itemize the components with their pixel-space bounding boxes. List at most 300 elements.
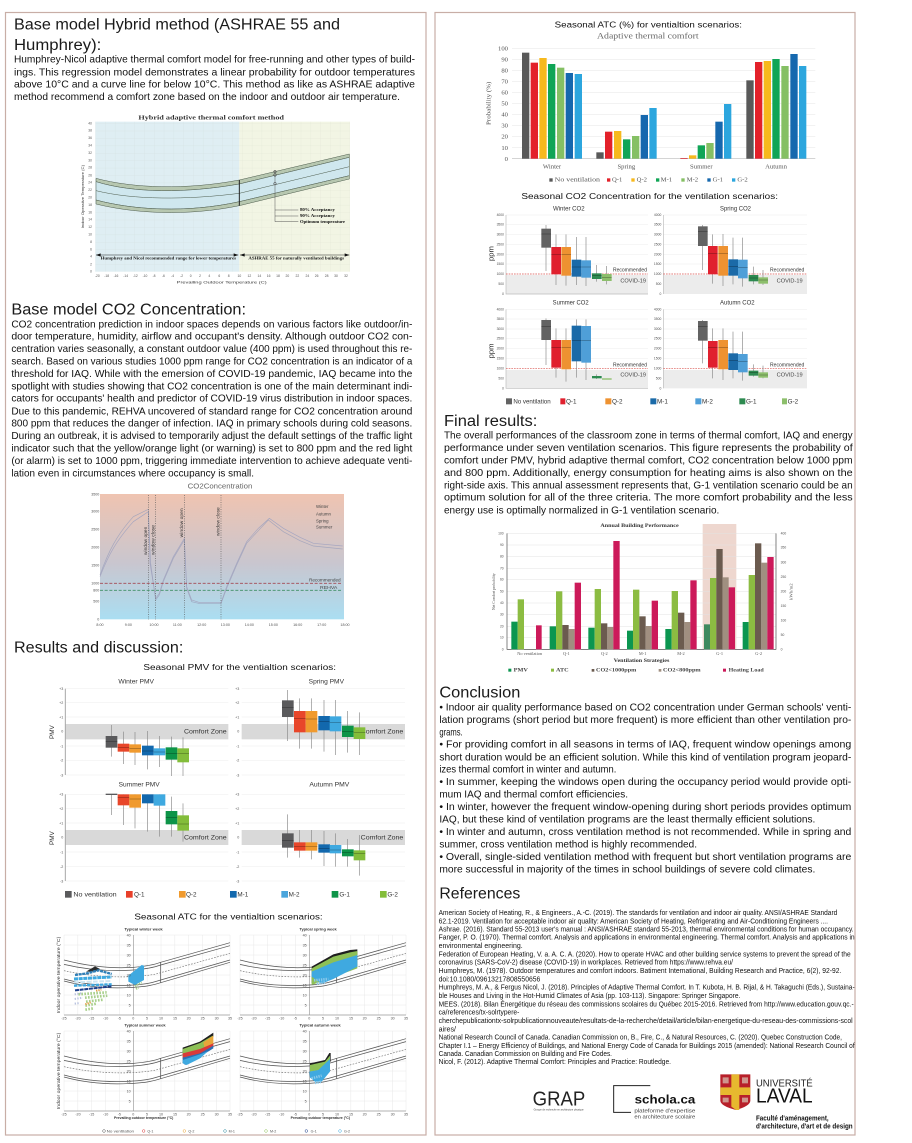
text block: references list: Fanger, P. O. (1970). Thermal comfort. Analysis and applications in environmental engineering. Thermal comfort. Analysis and applications in xyxy=(439,933,855,942)
chart: hybrid adaptive thermal comfort: 32 xyxy=(344,274,348,278)
chart: annual building performance: 250 xyxy=(781,575,786,579)
logo: Université Laval: d'architecture, d'art et de design xyxy=(756,1124,853,1131)
legend: ATC percent scenarios: Q-2 xyxy=(637,177,647,184)
text block: CO2 concentration description: Due to this pandemic, REHVA uncovered of standard range for CO2 concentration around xyxy=(11,406,412,417)
legend: PMV scenarios xyxy=(65,891,398,899)
chart: summer PMV box plot: +2 xyxy=(59,807,63,811)
chart: hybrid adaptive thermal comfort: 16 xyxy=(88,210,92,214)
text block: references list: Canada. Canadian Commission on Building and Fire Codes. xyxy=(439,1049,612,1058)
chart: autumn PMV box plot: Comfort Zone xyxy=(361,834,404,841)
chart: annual building performance: Annual Building Performance xyxy=(600,523,679,529)
chart: summer PMV box plot: PMV xyxy=(49,831,56,845)
legend: ATC percent scenarios: M-1 xyxy=(661,177,672,184)
chart: annual building performance: 100 xyxy=(498,531,504,535)
legend: ATC scenarios: G-2 xyxy=(344,1129,350,1133)
text block: references list: Chapter I.1 – Energy Efficiency of Buildings, and National Energy Code of Canada for Buildings 2015 (amended): National Research Council of xyxy=(439,1041,856,1050)
chart: CO2 concentration curve: Autumn xyxy=(316,512,332,517)
text block: references list: American Society of Heating, R., & Engineers., A.-C. (2019). The standards for ventilation and indoor air quality. ANSI/ASHRAE Standard xyxy=(439,908,837,917)
chart: CO2 concentration curve: Spring xyxy=(316,518,329,523)
heading: conclusion: Conclusion xyxy=(439,685,520,702)
text block: references list: National Research Council of Canada. Canadian Commission on, B., Fire, C., & Natural Resources, C. (2020). Quebec Construction Code, xyxy=(439,1033,842,1042)
chart: summer CO2 box plot: 4000 xyxy=(497,307,504,311)
legend: ATC percent scenarios: M-2 xyxy=(687,177,698,184)
chart: hybrid adaptive thermal comfort: 30 xyxy=(88,158,92,162)
legend: ATC percent scenarios: G-1 xyxy=(713,177,723,184)
chart: seasonal ATC percent bars: 0 xyxy=(505,156,509,163)
text block: conclusion bullets: • In summer, keeping the windows open during the occupancy period would provide opti- xyxy=(439,777,851,788)
text block: references list: Nicol, F. (2012). Adaptive Thermal Comfort: Principles and Practice: Routledge. xyxy=(439,1057,671,1066)
chart: hybrid adaptive thermal comfort: -10 xyxy=(143,274,148,278)
chart: spring CO2 box plot: 2000 xyxy=(654,252,661,256)
chart: hybrid adaptive thermal comfort: 20 xyxy=(88,195,92,199)
text block: CO2 concentration description: lation even in circumstances where occupancy is small. xyxy=(11,469,254,480)
chart: hybrid adaptive thermal comfort: 4 xyxy=(208,274,210,278)
chart: autumn CO2 box plot: Recommended xyxy=(770,362,804,368)
chart: spring CO2 box plot: 1000 xyxy=(654,272,661,276)
chart: spring CO2 box plot: 0 xyxy=(659,292,661,296)
chart: CO2 concentration curve: 500 xyxy=(93,599,99,603)
text block: final results description: energy use is optimally normalized in G-1 ventilation scenario. xyxy=(444,505,719,516)
chart: autumn PMV box plot: 0 xyxy=(237,836,239,840)
chart: hybrid adaptive thermal comfort: 36 xyxy=(88,136,92,140)
chart: hybrid adaptive thermal comfort: 2 xyxy=(90,262,92,266)
chart: summer CO2 box plot: 2000 xyxy=(497,347,504,351)
chart: typical autumn week: 5 xyxy=(305,1099,307,1103)
chart: hybrid adaptive thermal comfort: 24 xyxy=(88,181,92,185)
chart: typical winter week: 15 xyxy=(173,1017,177,1021)
chart: typical spring week: 35 xyxy=(303,943,307,947)
text block: hybrid method description: Humphrey-Nicol adaptive thermal comfort model for free-running and other types of build- xyxy=(14,55,415,66)
chart: autumn CO2 box plot: 1000 xyxy=(654,366,661,370)
chart: hybrid adaptive thermal comfort: 12 xyxy=(247,274,251,278)
chart: annual building performance: No ventilation xyxy=(517,651,543,656)
chart: spring CO2 box plot: 4000 xyxy=(654,213,661,217)
chart: hybrid adaptive thermal comfort: 10 xyxy=(88,233,92,237)
chart: autumn PMV box plot: +2 xyxy=(235,807,239,811)
chart: typical autumn week: Typical autumn week xyxy=(299,1022,341,1027)
chart: winter PMV box plot: 0 xyxy=(61,730,63,734)
chart: typical winter week: -10 xyxy=(103,1017,108,1021)
chart: winter PMV box plot: PMV xyxy=(49,725,56,739)
chart: autumn CO2 box plot: 3000 xyxy=(654,327,661,331)
chart: annual building performance: M-2 xyxy=(677,651,685,656)
text block: hybrid method description: ings. This regression model demonstrates a linear probability for outdoor temperatures xyxy=(14,67,415,78)
chart: winter CO2 box plot: 2000 xyxy=(497,252,504,256)
text block: hybrid method description: method recommend a comfort zone based on the indoor and outdoor air temperature. xyxy=(14,92,400,103)
chart: summer CO2 box plot: 2500 xyxy=(497,337,504,341)
chart: typical winter week: 40 xyxy=(127,933,131,937)
chart: typical winter week: 25 xyxy=(201,1017,205,1021)
logo: Université Laval: UNIVERSITÉ xyxy=(756,1079,813,1090)
chart: autumn CO2 box plot: 0 xyxy=(659,386,661,390)
chart: hybrid adaptive thermal comfort: 2 xyxy=(199,274,201,278)
chart: hybrid adaptive thermal comfort: ASHRAE 55 for naturally ventilated buildings xyxy=(248,256,345,260)
text block: CO2 concentration description: 800 ppm that reduces the danger of infection. IAQ in primary schools during cold seasons. xyxy=(11,419,412,430)
chart: CO2 concentration curve xyxy=(91,484,350,627)
chart: annual building performance: G-1 xyxy=(716,651,723,656)
legend: CO2 scenarios xyxy=(506,398,799,406)
chart: typical winter week: 10 xyxy=(159,1017,163,1021)
chart: CO2 concentration curve: 13:00 xyxy=(221,623,230,627)
chart: typical summer week: 5 xyxy=(146,1112,148,1116)
chart: annual building performance: 350 xyxy=(781,546,786,550)
chart: spring PMV box plot: -2 xyxy=(236,759,239,763)
text block: CO2 concentration description: indicator such that the yellow/orange light (or warning) is set to 800 ppm and the red light xyxy=(11,444,413,455)
chart: summer PMV box plot: -1 xyxy=(60,850,63,854)
legend: ATC scenarios xyxy=(103,1129,350,1133)
chart: typical winter week: -20 xyxy=(75,1017,81,1021)
legend: ATC percent scenarios xyxy=(549,177,748,184)
legend: annual performance: Heating Load xyxy=(729,668,765,674)
text block: conclusion bullets: mum IAQ and thermal comfort efficiencies. xyxy=(439,790,628,801)
chart: typical summer week: 40 xyxy=(127,1029,131,1033)
chart: typical autumn week: -20 xyxy=(251,1112,257,1116)
text block: CO2 concentration description xyxy=(11,319,413,480)
chart: typical summer week: 10 xyxy=(159,1112,163,1116)
chart: summer PMV box plot: -2 xyxy=(60,865,63,869)
chart: typical spring week: 25 xyxy=(303,963,307,967)
chart: typical autumn week: 35 xyxy=(404,1112,408,1116)
chart: autumn PMV box plot xyxy=(235,782,405,883)
chart: winter PMV box plot xyxy=(49,678,228,777)
chart: autumn CO2 box plot: 4000 xyxy=(654,307,661,311)
chart: winter CO2 box plot: 1000 xyxy=(497,272,504,276)
chart: hybrid adaptive thermal comfort: 6 xyxy=(90,247,92,251)
text block: final results description: and 800 ppm. Additionally, energy consumption for heating aims is also shown on the xyxy=(444,468,853,479)
chart: annual building performance: 400 xyxy=(781,531,786,535)
heading: references: References xyxy=(439,885,521,902)
chart: typical summer week: -5 xyxy=(118,1112,121,1116)
legend: ATC scenarios: No ventilation xyxy=(107,1129,134,1133)
chart: typical summer week xyxy=(56,1022,232,1120)
chart: typical winter week: 30 xyxy=(215,1017,219,1021)
chart: CO2 concentration curve: Winter xyxy=(316,504,329,509)
text block: hybrid method description: above 10°C and a curve line for below 10°C. This method as like as ASHRAE adaptive xyxy=(14,80,415,91)
chart: CO2 concentration curve: window open xyxy=(179,508,184,537)
legend: CO2 scenarios: G-2 xyxy=(788,399,799,406)
chart: winter PMV box plot: +2 xyxy=(59,701,63,705)
chart: CO2 concentration curve: 800 xyxy=(93,588,99,592)
chart: summer PMV box plot: Comfort Zone xyxy=(184,834,227,841)
logo: Université Laval: LAVAL xyxy=(756,1085,813,1107)
chart: typical autumn week: -10 xyxy=(279,1112,284,1116)
chart: typical spring week: 20 xyxy=(303,973,307,977)
chart: typical spring week: 20 xyxy=(363,1017,367,1021)
chart: typical autumn week: 10 xyxy=(335,1112,339,1116)
chart: typical summer week: 5 xyxy=(129,1099,131,1103)
heading: base model hybrid method xyxy=(14,16,340,54)
chart: typical autumn week: 15 xyxy=(349,1112,353,1116)
chart: CO2 concentration curve: 2000 xyxy=(91,546,99,550)
chart: typical autumn week: 20 xyxy=(363,1112,367,1116)
text block: references list: coronavirus (SARS-CoV-2) disease (COVID-19) in workplaces. Retrieved from https://www.rehva.eu/ xyxy=(439,958,734,967)
chart: autumn CO2 box plot: 3500 xyxy=(654,317,661,321)
chart: winter PMV box plot: Winter PMV xyxy=(118,678,155,685)
chart: CO2 concentration curve: 9:00 xyxy=(125,623,132,627)
chart: hybrid adaptive thermal comfort: -16 xyxy=(114,274,119,278)
chart: CO2 concentration curve: 0 xyxy=(97,617,99,621)
chart: winter CO2 box plot: 3500 xyxy=(497,223,504,227)
chart: winter CO2 box plot: COVID-19 xyxy=(620,278,646,284)
logo: Université Laval: Faculté d'aménagement, xyxy=(756,1115,829,1122)
logo: schola.ca: en architecture scolaire xyxy=(634,1114,695,1120)
chart: hybrid adaptive thermal comfort: 14 xyxy=(88,218,92,222)
chart: CO2 concentration curve: 2500 xyxy=(91,528,99,532)
chart: spring CO2 box plot: 3500 xyxy=(654,223,661,227)
chart: spring CO2 box plot: 500 xyxy=(656,282,661,286)
text block: final results description: optimum solution for all of the three criteria. The more comfort probability and the less xyxy=(444,493,853,504)
chart: typical spring week: -20 xyxy=(251,1017,257,1021)
chart: typical spring week: 5 xyxy=(305,1003,307,1007)
chart: summer PMV box plot: +3 xyxy=(59,793,63,797)
chart: annual building performance: M-1 xyxy=(639,651,646,656)
panel: right column xyxy=(435,12,856,1135)
chart: typical autumn week: 25 xyxy=(377,1112,381,1116)
chart: hybrid adaptive thermal comfort: 28 xyxy=(325,274,329,278)
legend: CO2 scenarios: No ventilation xyxy=(513,399,551,406)
chart: hybrid adaptive thermal comfort: 0 xyxy=(190,274,192,278)
chart: CO2 concentration curve: Recommended xyxy=(309,578,341,583)
legend: CO2 scenarios: Q-2 xyxy=(612,399,623,406)
chart: winter CO2 box plot: 3000 xyxy=(497,233,504,237)
chart: annual building performance: 40 xyxy=(500,601,504,605)
chart: autumn PMV box plot: -1 xyxy=(236,850,239,854)
chart heading: seasonal ATC: Seasonal ATC for the ventialtion scenarios: xyxy=(134,912,323,922)
chart: summer PMV box plot: Summer PMV xyxy=(119,782,160,789)
chart: annual building performance: 50 xyxy=(500,589,504,593)
chart: winter CO2 box plot: Winter CO2 xyxy=(553,206,585,213)
chart: CO2 concentration curve: 16:00 xyxy=(293,623,302,627)
chart: autumn CO2 box plot: 2500 xyxy=(654,337,661,341)
chart: typical spring week: 25 xyxy=(377,1017,381,1021)
text block: conclusion bullets: more successful in majority of the times in school buildings of severe cold climates. xyxy=(439,864,815,875)
chart: CO2 concentration curve: window open xyxy=(143,526,148,555)
chart: winter CO2 box plot: 4000 xyxy=(497,213,504,217)
legend: PMV scenarios: G-1 xyxy=(339,892,350,899)
chart: typical winter week: 35 xyxy=(127,943,131,947)
text block: hybrid method description xyxy=(14,55,415,103)
chart: CO2 concentration curve: 14:00 xyxy=(245,623,254,627)
heading: final results: Final results: xyxy=(444,413,537,430)
chart: spring PMV box plot: +2 xyxy=(235,701,239,705)
chart: spring PMV box plot: -3 xyxy=(236,773,239,777)
legend: ATC scenarios: M-2 xyxy=(270,1129,276,1133)
chart: typical autumn week: 30 xyxy=(303,1049,307,1053)
chart: typical summer week: 10 xyxy=(127,1089,131,1093)
chart: hybrid adaptive thermal comfort: 90% Acceptancy xyxy=(300,214,335,218)
chart: hybrid adaptive thermal comfort xyxy=(80,114,350,285)
chart: typical autumn week: 0 xyxy=(308,1112,310,1116)
chart: typical autumn week: Prevailing outdoor temperature (°C) xyxy=(291,1115,351,1120)
chart: typical autumn week: 15 xyxy=(303,1079,307,1083)
chart: typical winter week: Indoor operative temperature (°C) xyxy=(56,936,61,1013)
chart: hybrid adaptive thermal comfort: 38 xyxy=(88,129,92,133)
chart: winter CO2 box plot: 500 xyxy=(498,282,504,286)
chart: autumn CO2 box plot: 1500 xyxy=(654,356,661,360)
chart: summer CO2 box plot: Recommended xyxy=(613,362,647,368)
chart: spring CO2 box plot: Spring CO2 xyxy=(720,206,751,213)
text block: CO2 concentration description: During an outbreak, it is advised to temporarily adjust the default settings of the traffic light xyxy=(11,431,413,442)
chart: CO2 concentration curve: 3000 xyxy=(91,510,99,514)
chart: seasonal ATC percent bars xyxy=(486,32,815,184)
chart: CO2 concentration curve: 8:00 xyxy=(96,623,104,627)
chart: summer CO2 box plot: 1000 xyxy=(497,366,504,370)
chart: typical winter week: 5 xyxy=(146,1017,148,1021)
legend: CO2 scenarios: M-1 xyxy=(657,399,668,406)
chart: typical autumn week: 5 xyxy=(322,1112,324,1116)
legend: ATC percent scenarios: No ventilation xyxy=(555,177,601,184)
legend: annual performance: PMV xyxy=(514,668,529,674)
legend: PMV scenarios: M-1 xyxy=(237,892,249,899)
chart: typical summer week: 0 xyxy=(132,1112,134,1116)
chart: typical winter week: 20 xyxy=(127,973,131,977)
chart: summer PMV box plot: -3 xyxy=(60,879,63,883)
legend: ATC percent scenarios: G-2 xyxy=(737,177,748,184)
chart: annual building performance: 0 xyxy=(781,647,783,651)
chart: typical autumn week: 35 xyxy=(303,1039,307,1043)
chart: seasonal ATC percent bars: 70 xyxy=(501,79,509,86)
text block: references list: environmental engineering. xyxy=(439,941,523,950)
text block: conclusion bullets: short duration would be an efficient solution. While this kind of ventilation program jeopard- xyxy=(439,752,851,763)
chart: spring CO2 box plot: 2500 xyxy=(654,242,661,246)
chart: seasonal ATC percent bars: 60 xyxy=(501,90,509,97)
chart: spring PMV box plot: 0 xyxy=(237,730,239,734)
chart: autumn CO2 box plot: COVID-19 xyxy=(777,373,803,379)
chart: typical winter week: 20 xyxy=(187,1017,191,1021)
text block: references list: ca/references/tx-solrtypere- xyxy=(439,1008,520,1017)
chart: hybrid adaptive thermal comfort: 16 xyxy=(267,274,271,278)
chart: winter CO2 box plot: 2500 xyxy=(497,242,504,246)
chart: typical winter week: 25 xyxy=(127,963,131,967)
chart: typical summer week: -25 xyxy=(61,1112,67,1116)
chart: typical summer week: -10 xyxy=(103,1112,108,1116)
chart: typical autumn week: 20 xyxy=(303,1069,307,1073)
chart: typical summer week: 20 xyxy=(127,1069,131,1073)
chart: hybrid adaptive thermal comfort: 14 xyxy=(257,274,261,278)
text block: conclusion bullets xyxy=(439,702,851,875)
chart: hybrid adaptive thermal comfort: 0 xyxy=(90,270,92,274)
chart: typical spring week: 10 xyxy=(335,1017,339,1021)
chart: winter CO2 box plot: ppm xyxy=(487,246,496,261)
text block: conclusion bullets: IAQ, but these kind of ventilation programs are the least thermally efficient solutions. xyxy=(439,815,815,826)
chart: summer CO2 box plot: 3500 xyxy=(497,317,504,321)
chart: typical autumn week: 25 xyxy=(303,1059,307,1063)
text block: references list: Federation of European Heating, V. a. A. C. A. (2020). How to operate HVAC and other building service systems to prevent the spread of the xyxy=(439,949,851,958)
chart: seasonal ATC percent bars: 50 xyxy=(501,101,509,108)
chart: annual building performance: kWh/m2 xyxy=(789,583,794,600)
logo: schola.ca xyxy=(614,1086,696,1120)
chart: seasonal ATC percent bars: Probability (%) xyxy=(486,82,493,125)
chart: summer CO2 box plot: ppm xyxy=(487,343,496,358)
chart: winter PMV box plot: +1 xyxy=(59,715,63,719)
chart: hybrid adaptive thermal comfort: -4 xyxy=(171,274,174,278)
text block: references list: MEES. (2018). Bilan Énergétique du réseau des commissions scolaires du Québec 2015-2016. Retrieved from http://www.education.gouv.qc.- xyxy=(439,999,854,1008)
chart: summer CO2 box plot: COVID-19 xyxy=(620,373,646,379)
logo: GRAP: Groupe de recherche en architecture physique xyxy=(534,1108,584,1111)
chart: annual building performance: 300 xyxy=(781,560,786,564)
chart: typical winter week: 35 xyxy=(228,1017,232,1021)
chart: autumn CO2 box plot: 500 xyxy=(656,376,661,380)
chart: annual building performance: 200 xyxy=(781,589,786,593)
chart: annual building performance: 10 xyxy=(500,636,504,640)
chart: annual building performance: 30 xyxy=(500,613,504,617)
chart: annual building performance: 150 xyxy=(781,604,786,608)
chart: typical summer week: 30 xyxy=(215,1112,219,1116)
chart: seasonal ATC percent bars: Autumn xyxy=(765,164,788,171)
chart: spring PMV box plot: +1 xyxy=(235,715,239,719)
text block: references list: Humphreys, M. (1978). Outdoor temperatures and comfort indoors. Batiment International, Building Research and Practice, 6(2), 92-92. xyxy=(439,966,841,975)
chart: spring PMV box plot: +3 xyxy=(235,687,239,691)
chart: summer CO2 box plot: Summer CO2 xyxy=(553,299,589,306)
chart: hybrid adaptive thermal comfort: 8 xyxy=(228,274,230,278)
logo: schola.ca: plateforme d'expertise xyxy=(634,1109,695,1115)
chart: CO2 concentration curve: CO2Concentration xyxy=(188,484,252,491)
chart: typical winter week: -5 xyxy=(118,1017,121,1021)
logo: Université Laval xyxy=(720,1074,853,1131)
text block: CO2 concentration description: threshold for IAQ. While with the emersion of COVID-19 pandemic, IAQ became into the xyxy=(11,369,412,380)
text block: conclusion bullets: • Indoor air quality performance based on CO2 concentration under German schools' venti- xyxy=(439,702,851,713)
chart: CO2 concentration curve: 11:00 xyxy=(173,623,182,627)
chart: typical summer week: 20 xyxy=(187,1112,191,1116)
chart: spring PMV box plot xyxy=(235,678,405,777)
chart: CO2 concentration curve: Summer xyxy=(316,524,333,529)
chart: typical summer week: 35 xyxy=(127,1039,131,1043)
chart: hybrid adaptive thermal comfort: 10 xyxy=(237,274,241,278)
legend: CO2 scenarios: Q-1 xyxy=(566,399,577,406)
heading: base model hybrid method: Base model Hybrid method (ASHRAE 55 and xyxy=(14,16,340,33)
chart: typical summer week: 15 xyxy=(127,1079,131,1083)
chart: hybrid adaptive thermal comfort: 20 xyxy=(285,274,289,278)
chart: annual building performance: G-2 xyxy=(755,651,762,656)
chart: typical winter week: 5 xyxy=(129,1003,131,1007)
legend: ATC scenarios: Q-1 xyxy=(147,1129,153,1133)
heading: base model hybrid method: Humphrey): xyxy=(14,37,101,54)
chart: annual building performance: 90 xyxy=(500,543,504,547)
chart: autumn CO2 box plot xyxy=(654,299,807,390)
text block: final results description: right-side axis. This annual assessment represents that, G-1 ventilation scenario could be an xyxy=(444,480,853,491)
chart: typical autumn week: 40 xyxy=(303,1029,307,1033)
chart: typical winter week: 15 xyxy=(127,983,131,987)
text block: CO2 concentration description: cators for occupants' health and predictor of COVID-19 virus distribution in indoor spaces. xyxy=(11,394,412,405)
chart: CO2 concentration curve: 1000 xyxy=(91,581,99,585)
chart: hybrid adaptive thermal comfort: 26 xyxy=(315,274,319,278)
chart: seasonal ATC percent bars: 100 xyxy=(498,46,509,53)
chart: typical winter week: 30 xyxy=(127,953,131,957)
chart: hybrid adaptive thermal comfort: Hybrid adaptive thermal comfort method xyxy=(138,114,284,121)
text block: conclusion bullets: izes thermal comfort in winter and autumn. xyxy=(439,765,616,776)
legend: PMV scenarios: Q-1 xyxy=(134,892,145,899)
chart: typical winter week: -25 xyxy=(61,1017,67,1021)
chart: hybrid adaptive thermal comfort: 22 xyxy=(295,274,299,278)
text block: CO2 concentration description: centration varies seasonally, a constant outdoor value (400 ppm) is used throughout this re- xyxy=(11,344,412,355)
chart: winter CO2 box plot: 1500 xyxy=(497,262,504,266)
chart: typical spring week: 10 xyxy=(303,993,307,997)
legend: ATC scenarios: G-1 xyxy=(311,1129,317,1133)
text block: conclusion bullets: • Overall, single-sided ventilation method with frequent but short ventilation programs are xyxy=(439,852,851,863)
chart: hybrid adaptive thermal comfort: -20 xyxy=(95,274,100,278)
chart: winter PMV box plot: -1 xyxy=(60,744,63,748)
chart: hybrid adaptive thermal comfort: 40 xyxy=(88,121,92,125)
chart: spring PMV box plot: Spring PMV xyxy=(309,678,345,685)
chart: typical spring week xyxy=(237,926,408,1021)
chart: summer PMV box plot: +1 xyxy=(59,821,63,825)
chart: seasonal ATC percent bars: 20 xyxy=(501,134,509,141)
chart: autumn PMV box plot: +3 xyxy=(235,793,239,797)
chart: spring CO2 box plot: Recommended xyxy=(770,267,804,273)
text block: conclusion bullets: • In winter, however the frequent window-opening during short periods provides optimum xyxy=(439,802,851,813)
chart: hybrid adaptive thermal comfort: -14 xyxy=(123,274,128,278)
chart: hybrid adaptive thermal comfort: 12 xyxy=(88,225,92,229)
